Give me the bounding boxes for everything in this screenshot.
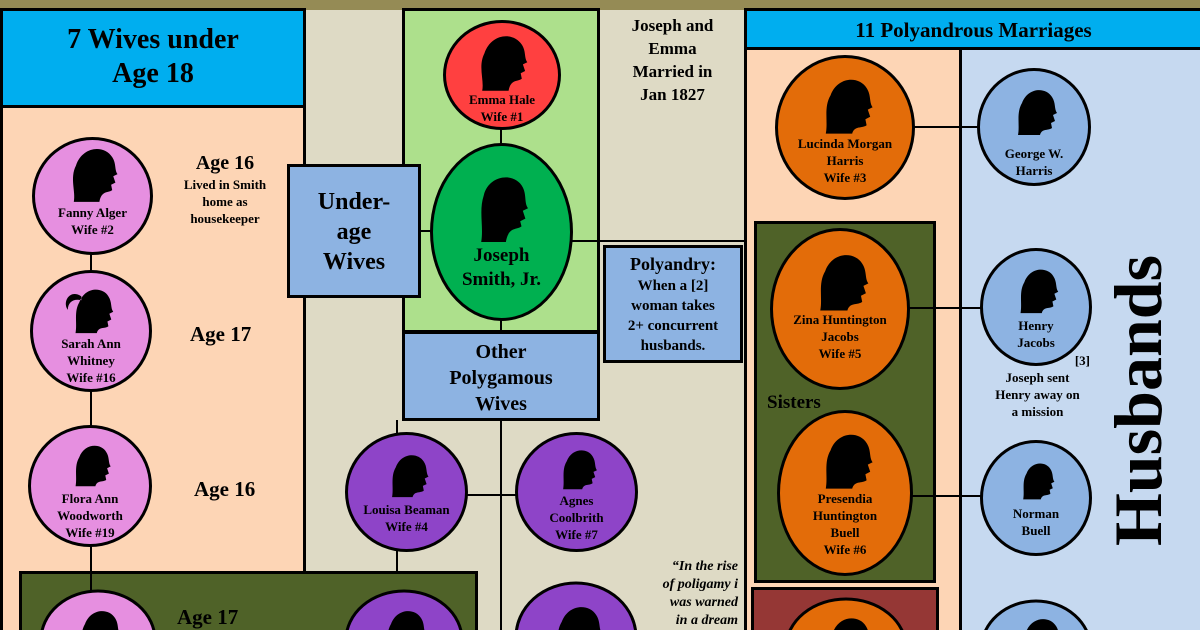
oval: George W. Harris: George W. bbox=[1005, 146, 1063, 161]
oval: red-group orange bbox=[788, 598, 904, 630]
oval: Louisa Beaman: Louisa Beaman bbox=[363, 502, 450, 517]
panel: red group bbox=[751, 587, 939, 630]
oval: Presendia Huntington Buell: Wife #6 bbox=[824, 542, 866, 557]
oval: Fanny Alger: Fanny Alger bbox=[58, 205, 127, 220]
oval: bottom purple left bbox=[346, 590, 462, 630]
oval: Joseph Smith bbox=[430, 143, 573, 321]
oval: Emma: Wife #1 bbox=[481, 109, 523, 124]
oval: Henry Jacobs: Henry bbox=[1018, 318, 1054, 333]
box: polyandry definition: Polyandry: bbox=[630, 254, 716, 274]
connectors bbox=[90, 250, 92, 595]
heading: 7 wives under age 18 bbox=[0, 8, 306, 108]
quote bbox=[662, 559, 738, 628]
oval: Sarah Ann Whitney: Wife #16 bbox=[66, 370, 116, 385]
text: henry note: Joseph sent bbox=[1006, 370, 1069, 385]
oval: Zina Huntington Jacobs bbox=[770, 228, 910, 390]
oval: Norman Buell: Buell bbox=[1022, 523, 1050, 538]
text: henry note: a mission bbox=[1012, 404, 1063, 419]
oval: Zina Huntington Jacobs: Jacobs bbox=[821, 329, 859, 344]
oval: Sarah Ann Whitney: Whitney bbox=[67, 353, 115, 368]
box: polyandry definition: When a [2] bbox=[638, 278, 708, 294]
oval: bottom blue bbox=[984, 600, 1088, 630]
text: married note: Emma bbox=[648, 39, 697, 58]
oval: Henry Jacobs bbox=[980, 248, 1092, 366]
box: polyandry definition bbox=[603, 245, 743, 363]
oval: Agnes Coolbrith: Coolbrith bbox=[549, 510, 604, 525]
oval: Norman Buell: Norman bbox=[1013, 506, 1059, 521]
oval: Sarah Ann Whitney bbox=[30, 270, 152, 392]
quote: was warned bbox=[670, 595, 738, 610]
oval: Agnes Coolbrith bbox=[515, 432, 638, 552]
text: fanny age bbox=[184, 152, 266, 226]
heading: 7 wives under age 18: 7 Wives under bbox=[67, 24, 239, 55]
box: polyandry definition: husbands. bbox=[641, 338, 705, 354]
quote: “In the rise bbox=[672, 559, 738, 574]
oval: Joseph Smith: Smith, Jr. bbox=[462, 269, 541, 290]
box: underage wives: Under- bbox=[318, 189, 390, 215]
oval: Fanny Alger: Wife #2 bbox=[71, 222, 114, 237]
text: married note bbox=[632, 16, 714, 104]
oval: Presendia Huntington Buell: Presendia bbox=[818, 491, 872, 506]
oval: Lucinda Morgan Harris: Lucinda Morgan bbox=[798, 136, 892, 151]
oval: Joseph Smith: Joseph bbox=[474, 245, 529, 266]
box: polyandry definition: woman takes bbox=[631, 298, 715, 314]
oval: Lucinda Morgan Harris: Wife #3 bbox=[824, 170, 866, 185]
heading: polyandrous: 11 Polyandrous Marriages bbox=[855, 18, 1092, 42]
quote: in a dream bbox=[676, 613, 738, 628]
label: sisters: Sisters bbox=[767, 392, 821, 413]
oval: Emma: Emma Hale bbox=[469, 92, 535, 107]
heading: 7 wives under age 18: Age 18 bbox=[112, 58, 194, 89]
oval: Flora Ann Woodworth: Wife #19 bbox=[65, 525, 115, 540]
oval: bottom pink bbox=[40, 590, 156, 630]
oval: Louisa Beaman bbox=[345, 432, 468, 552]
oval: Lucinda Morgan Harris: Harris bbox=[827, 153, 863, 168]
text: sarah age: Age 17 bbox=[190, 322, 251, 346]
box: other polygamous wives: Other bbox=[475, 341, 527, 363]
oval: Fanny Alger bbox=[32, 137, 153, 255]
quote: of poligamy i bbox=[663, 577, 738, 592]
text: fanny age: Age 16 bbox=[196, 152, 254, 174]
oval: Flora Ann Woodworth bbox=[28, 425, 152, 547]
text: henry note: Henry away on bbox=[995, 387, 1080, 402]
panel: left bottom group bbox=[19, 571, 478, 630]
oval: Presendia Huntington Buell: Huntington bbox=[813, 508, 877, 523]
oval: Zina Huntington Jacobs: Wife #5 bbox=[819, 346, 861, 361]
heading: husbands vertical: Husbands bbox=[1100, 254, 1176, 546]
panel: husbands bbox=[959, 47, 1200, 630]
box: underage wives bbox=[287, 164, 421, 298]
oval: Louisa Beaman: Wife #4 bbox=[385, 519, 428, 534]
heading: polyandrous bbox=[744, 8, 1200, 50]
box: underage wives: Wives bbox=[323, 249, 385, 275]
text: married note: Married in bbox=[633, 62, 712, 81]
oval: Zina Huntington Jacobs: Zina Huntington bbox=[793, 312, 887, 327]
oval: Sarah Ann Whitney: Sarah Ann bbox=[61, 336, 121, 351]
panel: left under-18 bbox=[0, 10, 306, 630]
panel: joseph column bbox=[402, 8, 600, 333]
oval: Presendia Huntington Buell bbox=[777, 410, 913, 576]
oval: Agnes Coolbrith: Agnes bbox=[560, 493, 593, 508]
oval: Norman Buell bbox=[980, 440, 1092, 556]
text: henry note bbox=[995, 353, 1090, 419]
box: underage wives: age bbox=[337, 219, 371, 245]
text: fanny age: housekeeper bbox=[190, 211, 260, 226]
oval: Lucinda Morgan Harris bbox=[775, 55, 915, 200]
text: henry note: [3] bbox=[1075, 353, 1090, 368]
top strip bbox=[0, 0, 1200, 10]
box: other polygamous wives: Polygamous bbox=[449, 367, 553, 389]
oval: Flora Ann Woodworth: Flora Ann bbox=[62, 491, 118, 506]
text: flora age: Age 16 bbox=[194, 477, 255, 501]
text: married note: Jan 1827 bbox=[640, 85, 705, 104]
oval: Emma bbox=[443, 20, 561, 130]
panel: sisters bbox=[754, 221, 936, 583]
oval: Presendia Huntington Buell: Buell bbox=[831, 525, 859, 540]
box: other polygamous wives: Wives bbox=[475, 393, 527, 415]
text: fanny age: home as bbox=[202, 194, 248, 209]
box: polyandry definition: 2+ concurrent bbox=[628, 318, 718, 334]
oval: Henry Jacobs: Jacobs bbox=[1017, 335, 1055, 350]
oval: George W. Harris: Harris bbox=[1016, 163, 1052, 178]
oval: bottom purple right bbox=[515, 582, 637, 630]
text: married note: Joseph and bbox=[632, 16, 713, 35]
text: bottom age: Age 17 bbox=[177, 605, 238, 629]
oval: Flora Ann Woodworth: Woodworth bbox=[57, 508, 123, 523]
oval: Agnes Coolbrith: Wife #7 bbox=[555, 527, 598, 542]
text: fanny age: Lived in Smith bbox=[184, 177, 266, 192]
oval: George W. Harris bbox=[977, 68, 1091, 186]
box: other polygamous wives bbox=[402, 331, 600, 421]
panel: polyandrous wives bbox=[744, 47, 962, 630]
